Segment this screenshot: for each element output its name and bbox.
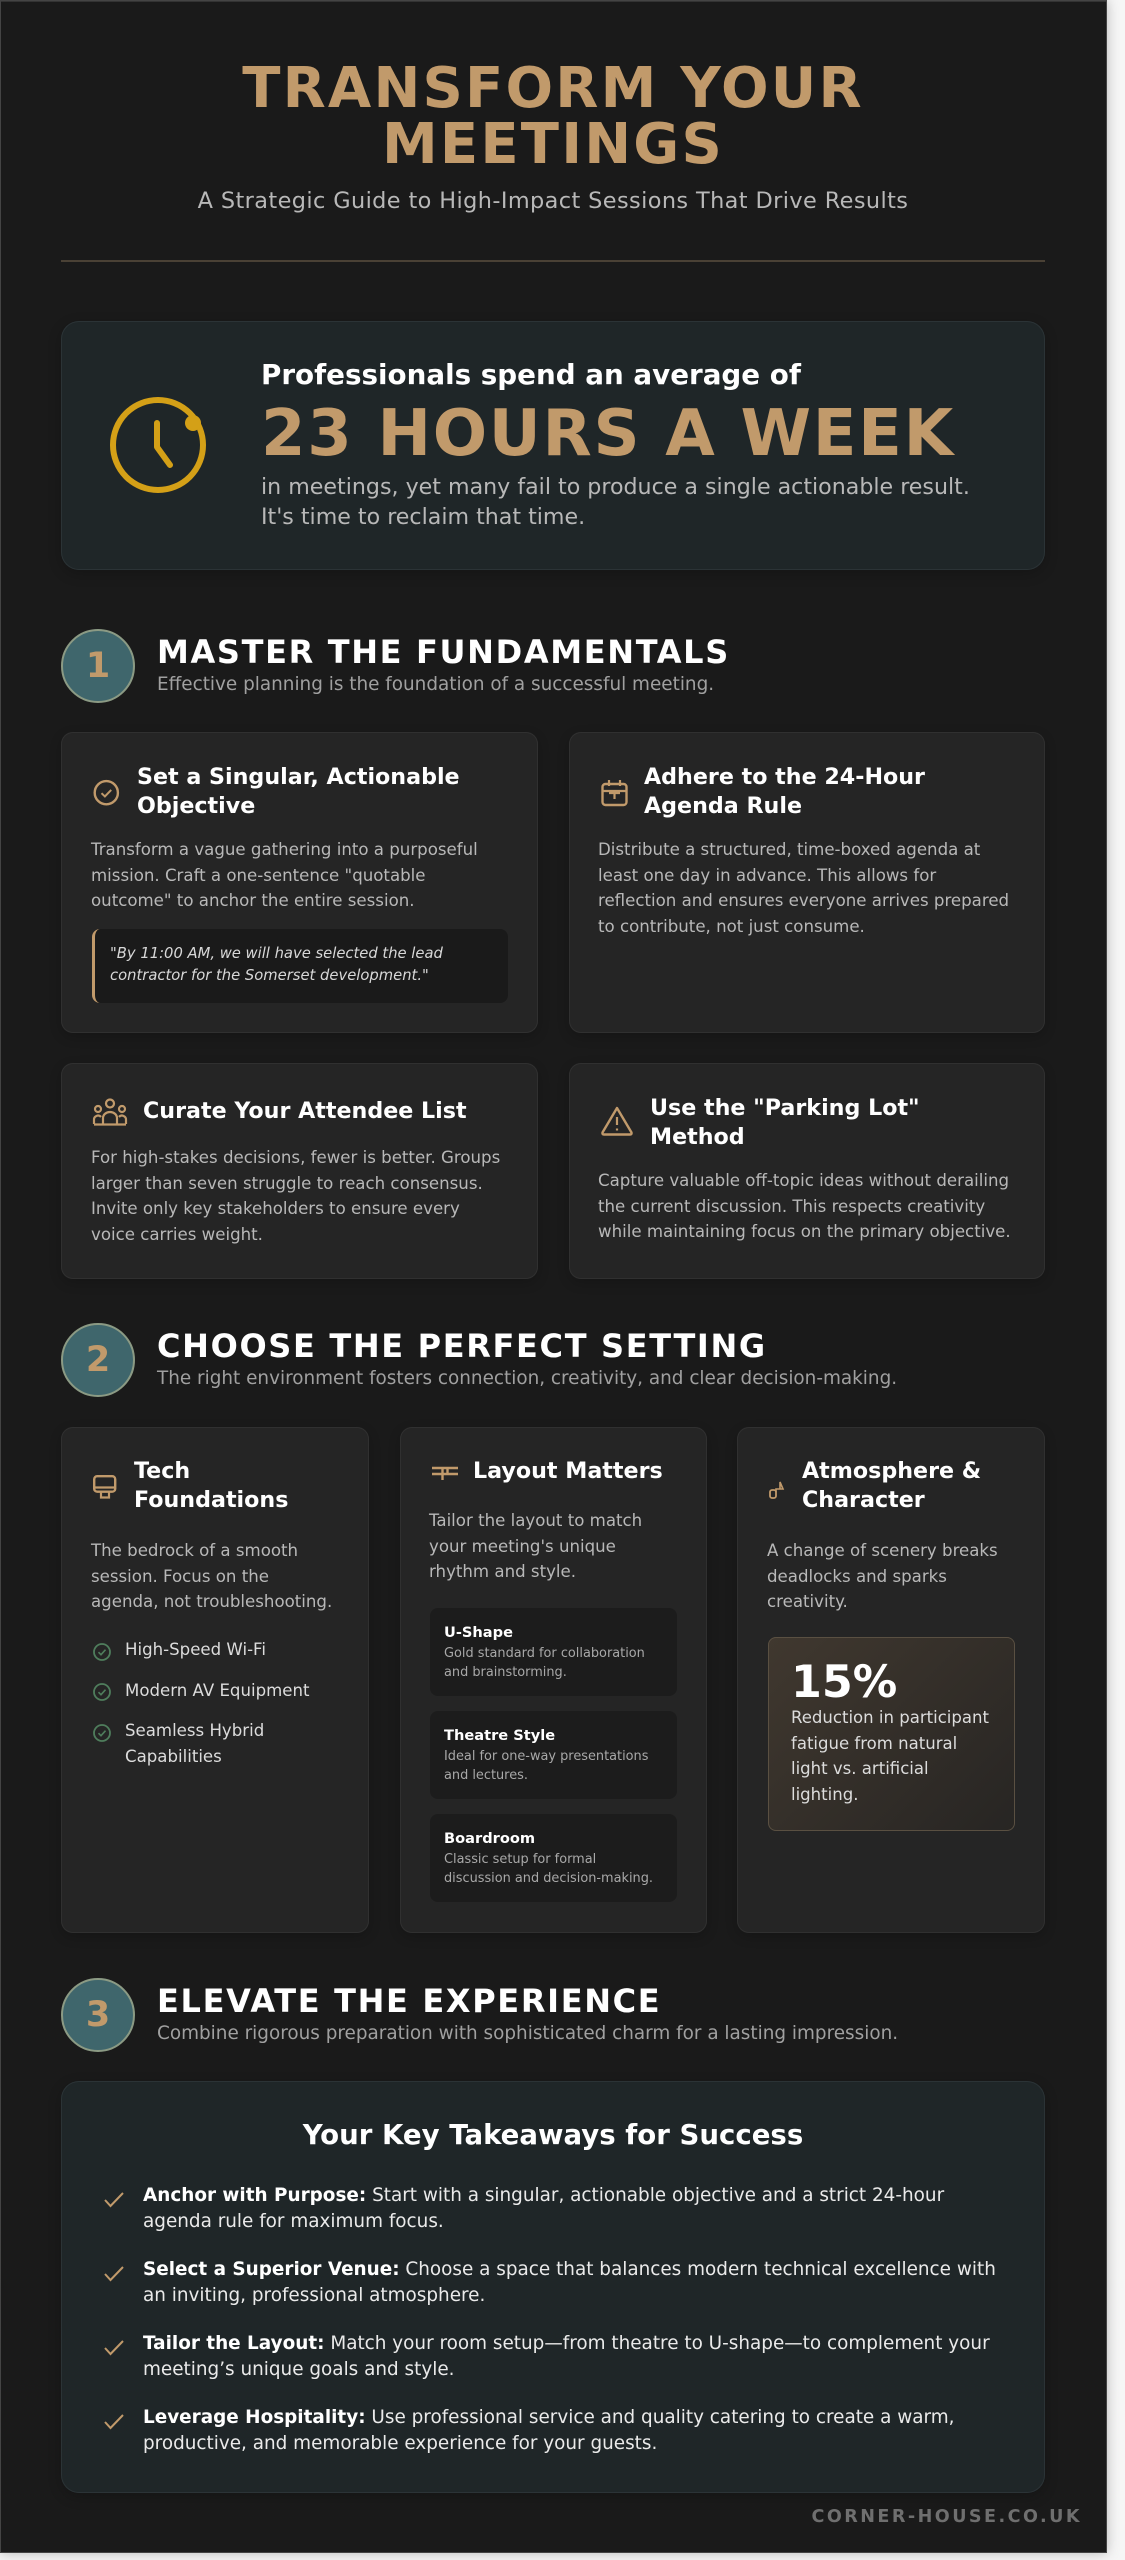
card body: Capture valuable off-topic ideas without derailing xyxy=(598,1171,1009,1190)
card body: voice carries weight. xyxy=(91,1225,263,1244)
layout: U-Shape xyxy=(430,1608,677,1696)
footer url: CORNER-HOUSE.CO.UK xyxy=(811,2507,1082,2527)
card body xyxy=(767,1541,998,1611)
layout description: Ideal for one-way presentations xyxy=(444,1749,648,1764)
panel: atmosphere and character xyxy=(737,1427,1045,1933)
number badge 1 xyxy=(61,629,135,703)
section 3 title: ELEVATE THE EXPERIENCE xyxy=(157,1982,661,2020)
card heading: Objective xyxy=(137,793,255,819)
hero description: It's time to reclaim that time. xyxy=(261,504,585,530)
card heading: Adhere to the 24-Hour xyxy=(644,764,925,790)
card body: mission. Craft a one-sentence "quotable xyxy=(91,866,426,885)
card heading xyxy=(137,764,460,819)
stat number: 15% xyxy=(791,1657,897,1708)
card body: Distribute a structured, time-boxed agenda at xyxy=(598,840,980,859)
section header 1 xyxy=(61,629,730,703)
card heading: Atmosphere & xyxy=(802,1458,981,1484)
number badge 2 xyxy=(61,1323,135,1397)
panel: key takeaways xyxy=(61,2081,1045,2493)
list item: Modern AV Equipment xyxy=(125,1680,310,1700)
card body: For high-stakes decisions, fewer is better. Groups xyxy=(91,1148,500,1167)
icon: green check xyxy=(93,1643,111,1661)
number badge 3 xyxy=(61,1978,135,2052)
layout description: discussion and decision-making. xyxy=(444,1871,653,1886)
card body: while maintaining focus on the primary objective. xyxy=(598,1222,1011,1241)
card body: agenda, not troubleshooting. xyxy=(91,1592,332,1611)
card body: Transform a vague gathering into a purposeful xyxy=(91,840,478,859)
takeaways heading: Your Key Takeaways for Success xyxy=(303,2118,803,2151)
stat description xyxy=(791,1708,989,1804)
list item xyxy=(125,1721,264,1766)
card body: deadlocks and sparks xyxy=(767,1567,947,1586)
takeaway 2: Select a Superior Venue: Choose a space that balances modern technical excellence with xyxy=(143,2259,996,2280)
stat description: lighting. xyxy=(791,1785,858,1804)
card heading: Use the "Parking Lot" xyxy=(650,1095,920,1121)
card body xyxy=(598,1171,1011,1241)
layout description: Gold standard for collaboration xyxy=(444,1646,645,1661)
layout description: and lectures. xyxy=(444,1768,528,1783)
section header 3 xyxy=(61,1978,898,2052)
panel: layout matters xyxy=(400,1427,707,1933)
icon: check mark xyxy=(104,2266,124,2282)
quote callout xyxy=(92,929,508,1003)
stat description: Reduction in participant xyxy=(791,1708,989,1727)
card body: session. Focus on the xyxy=(91,1567,269,1586)
card body xyxy=(428,1511,642,1581)
icon: clock xyxy=(110,397,206,493)
section header 2 xyxy=(61,1323,897,1397)
icon: music note xyxy=(769,1482,784,1499)
takeaway 1 xyxy=(143,2185,944,2232)
number badge 1: 1 xyxy=(86,646,110,686)
hero number: 23 HOURS A WEEK xyxy=(261,397,955,471)
layout name: Theatre Style xyxy=(444,1727,555,1744)
quote text: "By 11:00 AM, we will have selected the lead xyxy=(110,945,443,962)
panel: hero statistic xyxy=(61,321,1045,570)
list item: Seamless Hybrid xyxy=(125,1721,264,1740)
layout name: U-Shape xyxy=(444,1624,513,1641)
panel: parking lot card xyxy=(569,1063,1045,1279)
icon: check mark xyxy=(104,2192,124,2208)
card body xyxy=(90,1541,332,1611)
title: TRANSFORM YOUR xyxy=(242,56,864,121)
icon: check mark xyxy=(104,2414,124,2429)
card heading: Tech xyxy=(134,1458,190,1484)
quote text: contractor for the Somerset development." xyxy=(110,967,429,984)
section 1 title: MASTER THE FUNDAMENTALS xyxy=(157,633,730,671)
layout description: Classic setup for formal xyxy=(444,1852,596,1867)
takeaway 1: Anchor with Purpose: Start with a singular, actionable objective and a strict 24-hour xyxy=(143,2185,944,2206)
card body: Invite only key stakeholders to ensure every xyxy=(91,1199,460,1218)
stat callout xyxy=(768,1637,1015,1831)
feature list xyxy=(93,1640,310,1766)
layout description xyxy=(444,1852,653,1886)
icon: green check xyxy=(93,1724,111,1742)
takeaway 2: an inviting, professional atmosphere. xyxy=(143,2285,485,2306)
card body: least one day in advance. This allows for xyxy=(598,866,936,885)
card heading: Foundations xyxy=(134,1487,288,1513)
card heading: Curate Your Attendee List xyxy=(143,1098,467,1124)
takeaway 4: productive, and memorable experience for your guests. xyxy=(143,2433,657,2454)
takeaway 2 xyxy=(143,2259,996,2306)
takeaway 3 xyxy=(143,2331,990,2384)
takeaway 3: meeting’s unique goals and style. xyxy=(143,2359,455,2380)
card body: outcome" to anchor the entire session. xyxy=(91,891,415,910)
number badge 2: 2 xyxy=(86,1340,110,1380)
title: MEETINGS xyxy=(382,112,724,176)
panel: attendee card xyxy=(61,1063,538,1279)
card heading: Method xyxy=(650,1124,745,1150)
hero description xyxy=(261,474,970,530)
layout name: Boardroom xyxy=(444,1830,535,1847)
layout description xyxy=(444,1646,645,1680)
section 3 subtitle: Combine rigorous preparation with sophisticated charm for a lasting impression. xyxy=(157,2023,898,2044)
panel: agenda card xyxy=(569,732,1045,1033)
card body xyxy=(91,1148,500,1244)
card heading xyxy=(134,1458,288,1513)
section 2 subtitle: The right environment fosters connection, creativity, and clear decision-making. xyxy=(157,1368,897,1389)
card heading: Set a Singular, Actionable xyxy=(137,764,460,790)
card heading xyxy=(650,1095,920,1150)
panel: objective card xyxy=(61,732,538,1033)
icon: green check xyxy=(93,1683,111,1701)
layout description: and brainstorming. xyxy=(444,1665,567,1680)
card body: your meeting's unique xyxy=(429,1537,616,1556)
hero description: in meetings, yet many fail to produce a single actionable result. xyxy=(261,474,970,500)
icon: calendar xyxy=(601,780,628,806)
layout: Theatre Style xyxy=(430,1711,677,1799)
list item: High-Speed Wi-Fi xyxy=(125,1640,266,1659)
takeaway 4 xyxy=(143,2405,955,2458)
card body: rhythm and style. xyxy=(429,1562,576,1581)
card heading: Character xyxy=(802,1487,925,1513)
card heading: Layout Matters xyxy=(473,1458,663,1484)
panel: tech foundations xyxy=(61,1427,369,1933)
layout: Boardroom xyxy=(430,1814,677,1902)
icon: warning triangle xyxy=(601,1106,633,1136)
list item: Capabilities xyxy=(125,1747,222,1766)
card body xyxy=(598,840,1009,936)
card heading xyxy=(802,1458,981,1513)
card body: A change of scenery breaks xyxy=(767,1541,998,1560)
layout description xyxy=(444,1749,648,1783)
icon: check mark xyxy=(104,2340,124,2355)
takeaway 3: Tailor the Layout: Match your room setup—from theatre to U-shape—to complement your xyxy=(143,2333,990,2354)
card body: the current discussion. This respects creativity xyxy=(598,1197,985,1216)
icon: layout xyxy=(432,1466,458,1480)
card body xyxy=(90,840,478,910)
section 2 title: CHOOSE THE PERFECT SETTING xyxy=(157,1327,767,1365)
takeaway 4: Leverage Hospitality: Use professional service and quality catering to create a warm, xyxy=(143,2407,955,2428)
title xyxy=(242,56,864,176)
card body: The bedrock of a smooth xyxy=(91,1541,298,1560)
icon: target check xyxy=(94,780,120,806)
subtitle: A Strategic Guide to High-Impact Sessions That Drive Results xyxy=(198,188,908,214)
card heading: Agenda Rule xyxy=(644,793,802,819)
number badge 3: 3 xyxy=(86,1995,110,2035)
card body: larger than seven struggle to reach consensus. xyxy=(91,1174,483,1193)
section 1 subtitle: Effective planning is the foundation of a successful meeting. xyxy=(157,674,714,695)
card heading xyxy=(644,764,925,819)
icon: monitor xyxy=(93,1475,116,1499)
takeaway 1: agenda rule for maximum focus. xyxy=(143,2211,444,2232)
card body: creativity. xyxy=(767,1592,848,1611)
card body: to contribute, not just consume. xyxy=(598,917,865,936)
quote text xyxy=(110,945,443,984)
stat description: light vs. artificial xyxy=(791,1759,929,1778)
hero lead-in: Professionals spend an average of xyxy=(261,358,801,391)
icon: people group xyxy=(92,1098,128,1126)
card body: reflection and ensures everyone arrives prepared xyxy=(598,891,1009,910)
card body: Tailor the layout to match xyxy=(429,1511,642,1530)
stat description: fatigue from natural xyxy=(791,1734,957,1753)
header: title and subtitle xyxy=(198,56,908,214)
